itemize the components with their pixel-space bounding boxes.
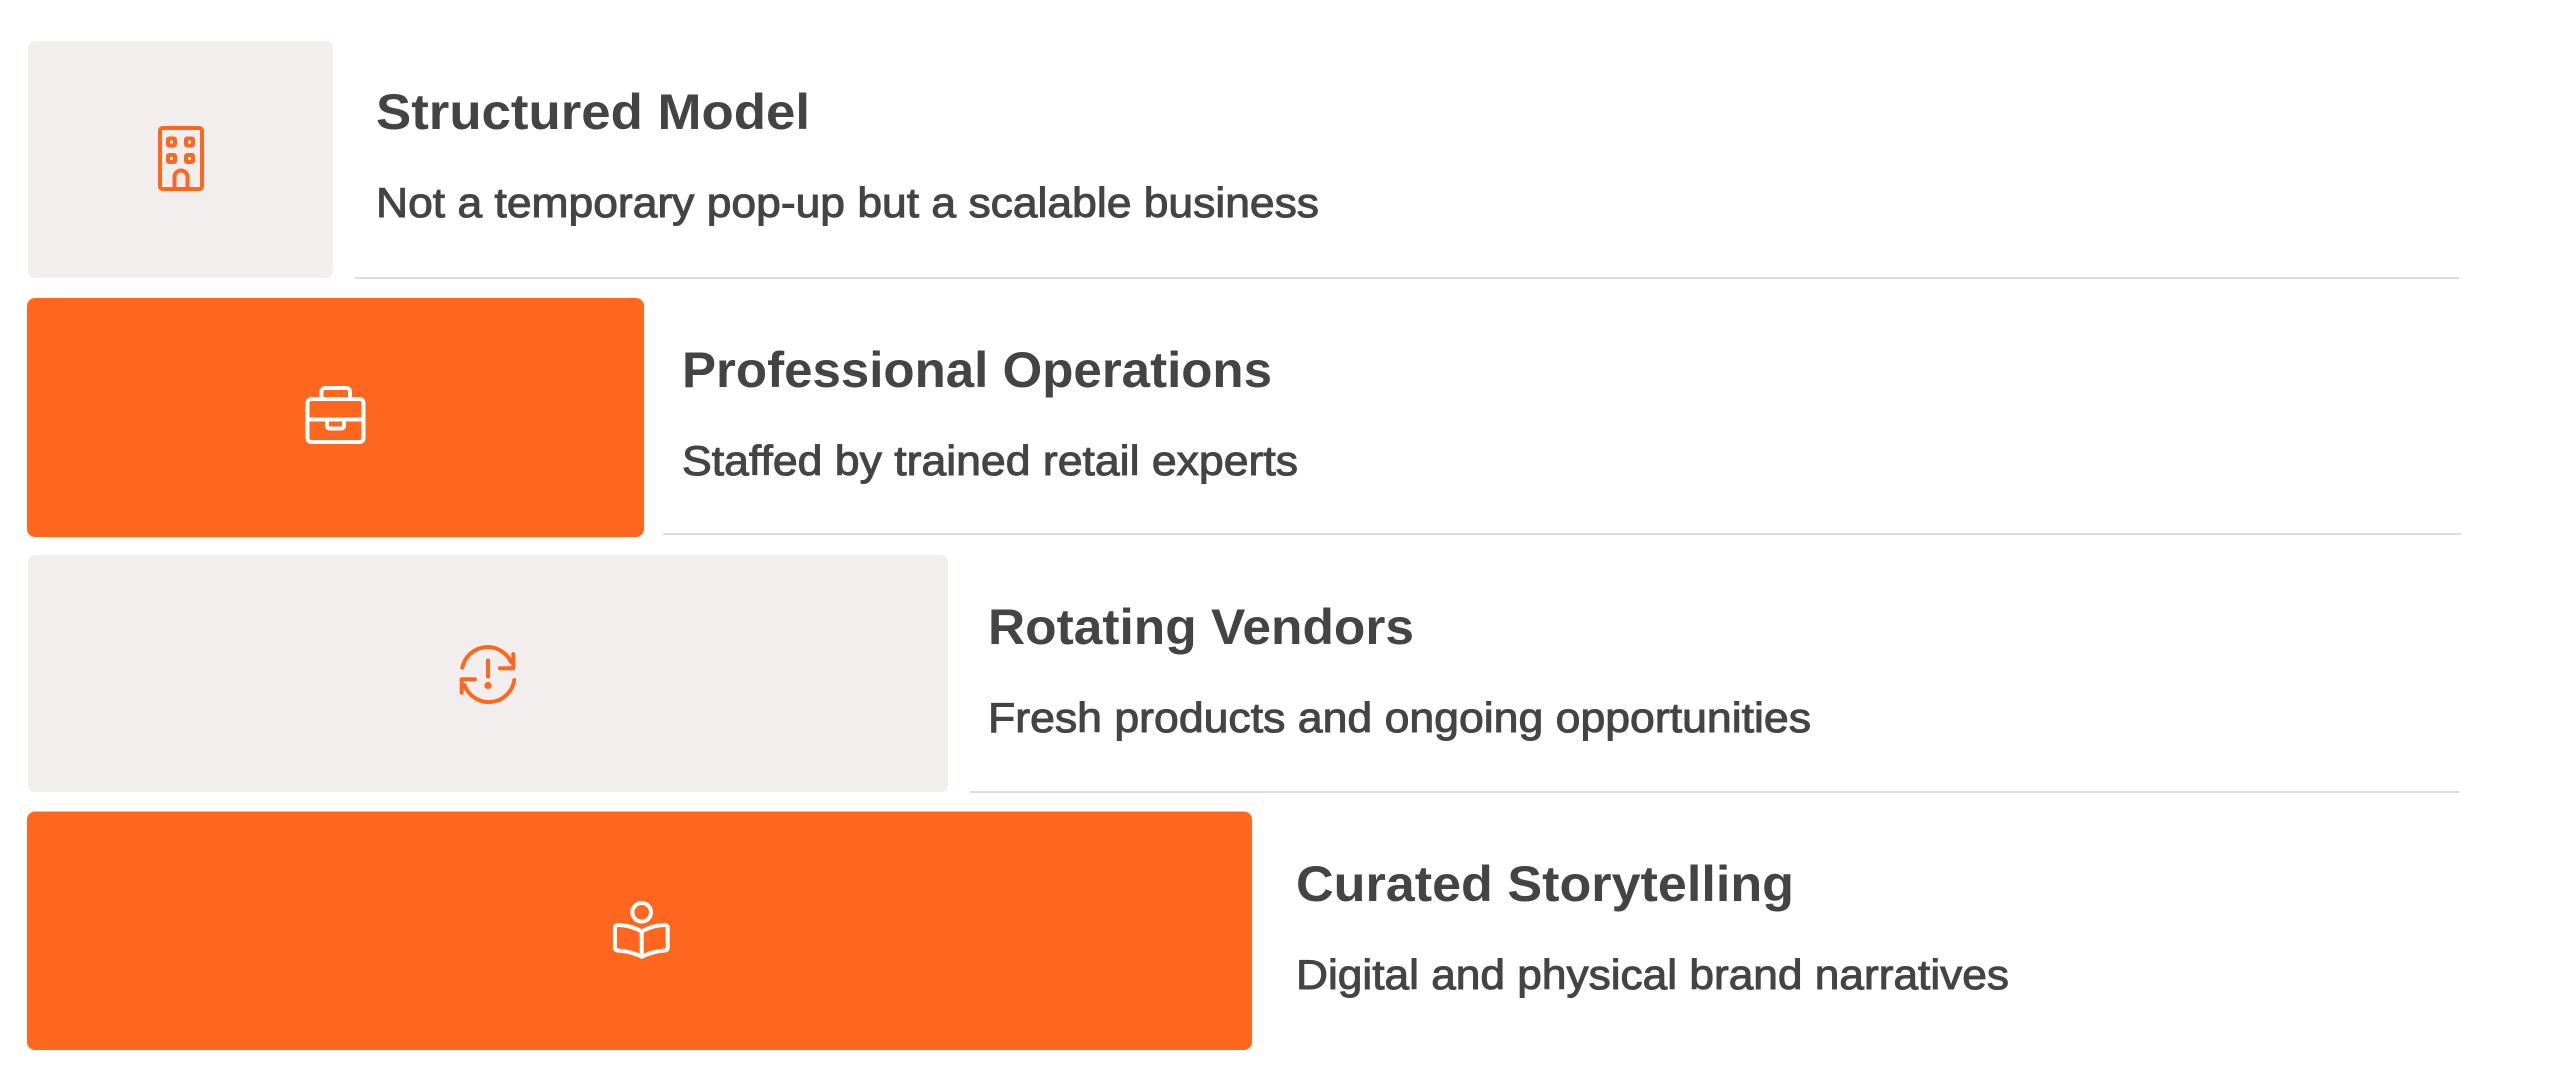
- icon: briefcase: [308, 388, 364, 442]
- panel: professional operations: [27, 298, 1298, 537]
- panel: structured model: [28, 41, 1319, 278]
- text: structured model description: Not a temporary pop-up but a scalable business: [376, 179, 1319, 226]
- text: rotating vendors description: Fresh products and ongoing opportunities: [988, 694, 1811, 741]
- icon: rotating alert: [462, 647, 514, 702]
- text: curated storytelling description: Digital and physical brand narratives: [1296, 951, 2009, 998]
- heading: professional operations: Professional Operations: [682, 342, 1272, 398]
- card: curated storytelling: [27, 812, 1252, 1050]
- panel: rotating vendors: [28, 555, 1811, 792]
- icon: building: [160, 128, 202, 189]
- icon: reader with book: [615, 903, 668, 957]
- heading: curated storytelling: Curated Storytelling: [1296, 856, 1794, 912]
- card: rotating vendors: [28, 555, 948, 792]
- card: structured model: [28, 41, 333, 278]
- card: professional operations: [27, 298, 644, 537]
- heading: rotating vendors: Rotating Vendors: [988, 599, 1414, 655]
- text: professional operations description: Staffed by trained retail experts: [682, 437, 1298, 484]
- panel: curated storytelling: [27, 812, 2009, 1050]
- heading: structured model: Structured Model: [376, 84, 810, 140]
